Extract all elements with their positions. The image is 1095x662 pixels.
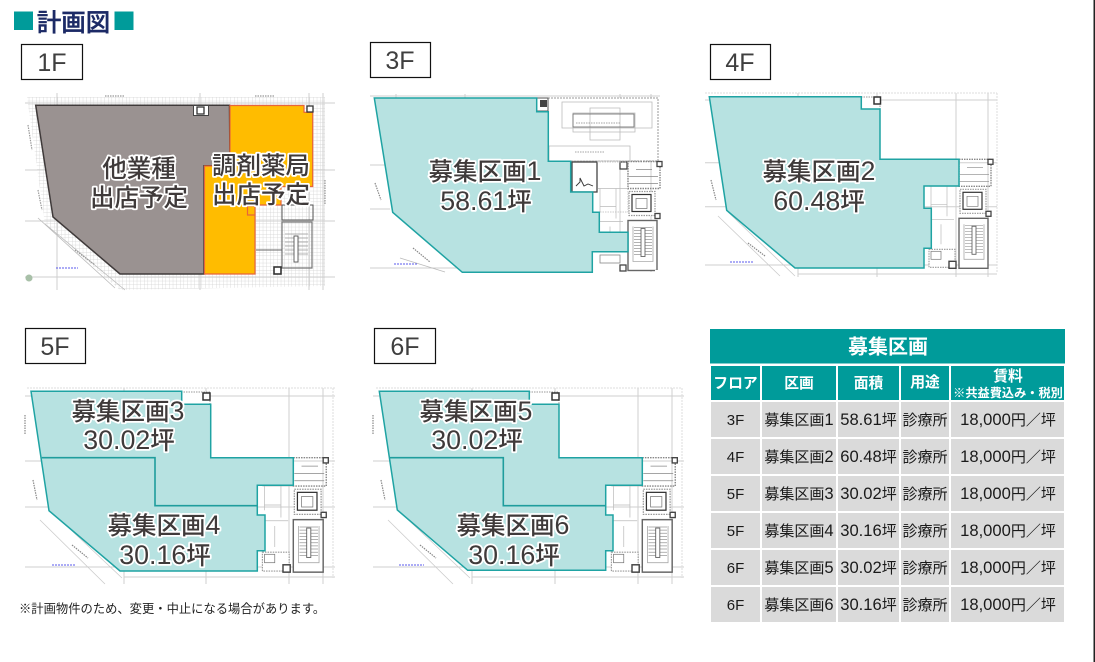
row 4F: 60.48坪 (840, 447, 897, 466)
row 4F: 診療所 (902, 449, 948, 466)
floor tag 6F: 6F (390, 333, 420, 361)
table header row: 賃料 (993, 367, 1023, 385)
title: 計画図: 計画図 (37, 9, 110, 37)
leasing sections 5 and 6 area (379, 391, 642, 570)
label: 調剤薬局 出店予定: 調剤薬局 (212, 152, 310, 180)
row 5F section 4: 募集区画4 (764, 521, 834, 540)
floor tag 5F: 5F (40, 333, 70, 361)
row 3F: 58.61坪 (840, 410, 897, 429)
leasing section 1 area (374, 98, 628, 272)
row 6F section 5: 募集区画5 (764, 558, 834, 577)
floor tag 4F: 4F (725, 49, 755, 77)
row 6F section 6: 18,000円／坪 (960, 595, 1056, 614)
row 6F section 6: 30.16坪 (840, 595, 897, 614)
floor tag 3F (370, 42, 430, 78)
row 5F section 3: 5F (727, 486, 744, 503)
table header row (711, 366, 1064, 400)
row 5F section 3: 診療所 (902, 486, 948, 503)
label: 募集区画3 30.02坪 (72, 396, 184, 455)
label: 募集区画5 30.02坪 (420, 396, 532, 455)
note: ※計画物件のため、変更・中止になる場合があります。 (19, 601, 325, 616)
table header row: ※共益費込み・税別 (953, 385, 1063, 400)
label: 募集区画6 30.16坪 (457, 510, 569, 570)
row 3F: 診療所 (902, 412, 948, 429)
panel: 4F floor plan (705, 44, 997, 277)
row 6F section 5 (711, 550, 1064, 585)
floor tag 6F (374, 328, 436, 364)
row 5F section 4: 診療所 (902, 523, 948, 540)
row 5F section 3 (711, 476, 1064, 511)
label: 調剤薬局 出店予定: 出店予定 (212, 181, 310, 209)
row 3F (711, 402, 1064, 437)
row 6F section 6: 募集区画6 (764, 595, 834, 614)
label: 他業種 出店予定: 他業種 (102, 155, 176, 183)
row 4F (711, 439, 1064, 474)
label: 募集区画1 58.61坪: 58.61坪 (440, 186, 532, 216)
label: 募集区画3 30.02坪: 募集区画3 (72, 396, 184, 426)
label: 募集区画2 60.48坪 (763, 156, 875, 216)
label: 募集区画3 30.02坪: 30.02坪 (83, 425, 175, 455)
label: 募集区画4 30.16坪: 募集区画4 (108, 510, 221, 540)
boundary between sections 3 and 4 (42, 458, 257, 506)
row 4F: 18,000円／坪 (960, 447, 1056, 466)
row 5F section 3: 18,000円／坪 (960, 484, 1056, 503)
label: 募集区画2 60.48坪: 募集区画2 (763, 156, 875, 186)
leasing sections 3 and 4 area (31, 391, 293, 571)
table title bar (710, 329, 1065, 364)
right edge line (1094, 0, 1095, 662)
label: 他業種 出店予定 (90, 155, 188, 212)
label: 募集区画6 30.16坪: 30.16坪 (468, 540, 560, 570)
label: 募集区画4 30.16坪 (108, 510, 221, 570)
label: 募集区画1 58.61坪: 募集区画1 (429, 156, 541, 186)
label: 募集区画5 30.02坪: 募集区画5 (420, 396, 532, 426)
row 5F section 3: 募集区画3 (764, 484, 834, 503)
table header row: フロア (713, 376, 758, 392)
pharmacy area (204, 106, 313, 274)
floor tag 1F: 1F (37, 49, 67, 77)
row 3F: 3F (727, 412, 744, 429)
panel: 1F floor plan (22, 44, 335, 290)
label: 募集区画2 60.48坪: 60.48坪 (773, 186, 865, 216)
label: 募集区画5 30.02坪: 30.02坪 (431, 425, 523, 455)
boundary between sections 5 and 6 (390, 458, 606, 506)
row 6F section 5: 30.02坪 (840, 558, 897, 577)
row 4F: 募集区画2 (764, 447, 834, 466)
row 6F section 6: 診療所 (902, 597, 948, 614)
row 5F section 3: 30.02坪 (840, 484, 897, 503)
row 5F section 4: 30.16坪 (840, 521, 897, 540)
label: 募集区画1 58.61坪 (429, 156, 541, 216)
row 4F: 4F (727, 449, 744, 466)
floor tag 5F (26, 328, 86, 364)
panel: 5F floor plan (25, 328, 335, 584)
plan background 3F (370, 94, 665, 275)
site plan hatch and grid (25, 93, 335, 290)
plan background 5F (25, 388, 335, 584)
row 6F section 5: 18,000円／坪 (960, 558, 1056, 577)
table header row: 用途 (910, 374, 940, 391)
table: 募集区画 (710, 329, 1065, 622)
plan background 4F (705, 93, 997, 277)
row 5F section 4: 5F (727, 523, 744, 540)
row 5F section 4 (711, 513, 1064, 548)
panel: 6F floor plan (373, 328, 684, 584)
floor tag 1F (22, 44, 82, 80)
label: 他業種 出店予定: 出店予定 (90, 184, 188, 212)
floor tag 3F: 3F (385, 47, 415, 75)
row 6F section 5: 診療所 (902, 560, 948, 577)
row 3F: 募集区画1 (764, 410, 834, 429)
table header row: 面積 (854, 374, 883, 392)
title: 計画図 (14, 9, 134, 37)
table header row: 区画 (784, 376, 814, 392)
floor tag 4F (710, 44, 770, 80)
label: 募集区画6 30.16坪: 募集区画6 (457, 510, 569, 540)
row 6F section 6 (711, 587, 1064, 622)
row 5F section 4: 18,000円／坪 (960, 521, 1056, 540)
label: 募集区画4 30.16坪: 30.16坪 (119, 540, 211, 570)
row 3F: 18,000円／坪 (960, 410, 1056, 429)
leasing section 2 area (709, 97, 959, 268)
row 6F section 6: 6F (727, 597, 744, 614)
label: 調剤薬局 出店予定 (212, 152, 310, 209)
row 6F section 5: 6F (727, 560, 744, 577)
table title bar: 募集区画 (848, 336, 928, 358)
panel: 3F floor plan (370, 42, 665, 275)
other tenants area (36, 105, 230, 274)
plan background 6F (373, 388, 684, 584)
